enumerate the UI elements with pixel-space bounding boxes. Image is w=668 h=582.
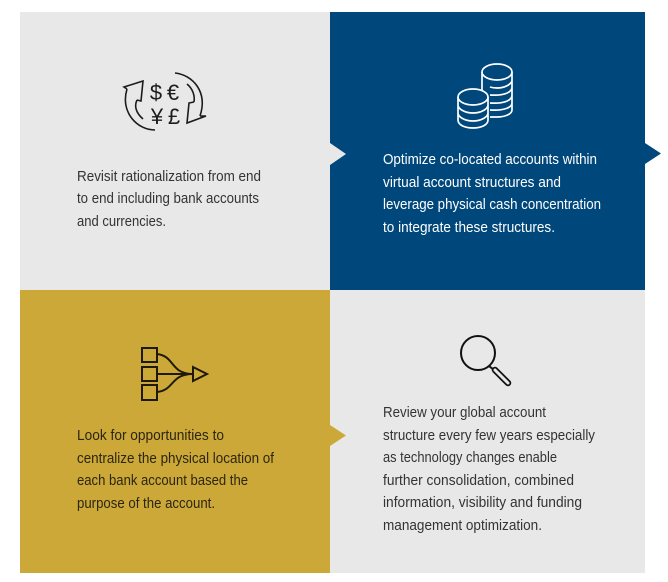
text: rationalization: and currencies. [77, 213, 166, 230]
panel: periodic review [330, 290, 645, 573]
panel: virtual accounts [330, 12, 645, 290]
text: periodic review: management optimization. [383, 517, 542, 534]
icon: currency exchange [124, 73, 206, 130]
text: physical location [77, 427, 275, 512]
text: periodic review: structure every few years especially [383, 427, 595, 444]
text: periodic review [383, 404, 595, 534]
icon: currency exchange: £ [168, 104, 180, 129]
text: periodic review: further consolidation, combined [383, 472, 574, 489]
text: periodic review: as technology changes enable [383, 449, 557, 466]
icon: currency exchange: $ [150, 80, 162, 105]
arrow: blue outward [645, 143, 661, 164]
arrow: gray to blue [330, 143, 346, 165]
text: virtual accounts [383, 151, 601, 236]
icon: currency exchange: ¥ [150, 104, 164, 129]
text: periodic review: information, visibility and funding [383, 494, 582, 511]
text: physical location: Look for opportunities to [77, 427, 224, 444]
text: rationalization [77, 168, 261, 230]
text: periodic review: Review your global account [383, 404, 547, 421]
arrow: gold to gray [330, 425, 346, 446]
icon: flow funnel [142, 348, 207, 400]
text: rationalization: to end including bank accounts [77, 190, 259, 207]
text: virtual accounts: to integrate these structures. [383, 219, 555, 236]
icon: magnifying glass [461, 336, 508, 383]
icon: currency exchange: € [167, 80, 179, 105]
text: physical location: each bank account based the [77, 472, 248, 489]
text: virtual accounts: Optimize co-located accounts within [383, 151, 597, 168]
text: virtual accounts: leverage physical cash concentration [383, 196, 601, 213]
text: physical location: purpose of the account. [77, 495, 215, 512]
text: rationalization: Revisit rationalization from end [77, 168, 261, 185]
text: virtual accounts: virtual account structures and [383, 174, 561, 191]
icon: coin stacks [458, 64, 512, 128]
panel: rationalization [20, 12, 330, 290]
text: physical location: centralize the physical location of [77, 450, 275, 467]
panel: physical location [20, 290, 330, 573]
